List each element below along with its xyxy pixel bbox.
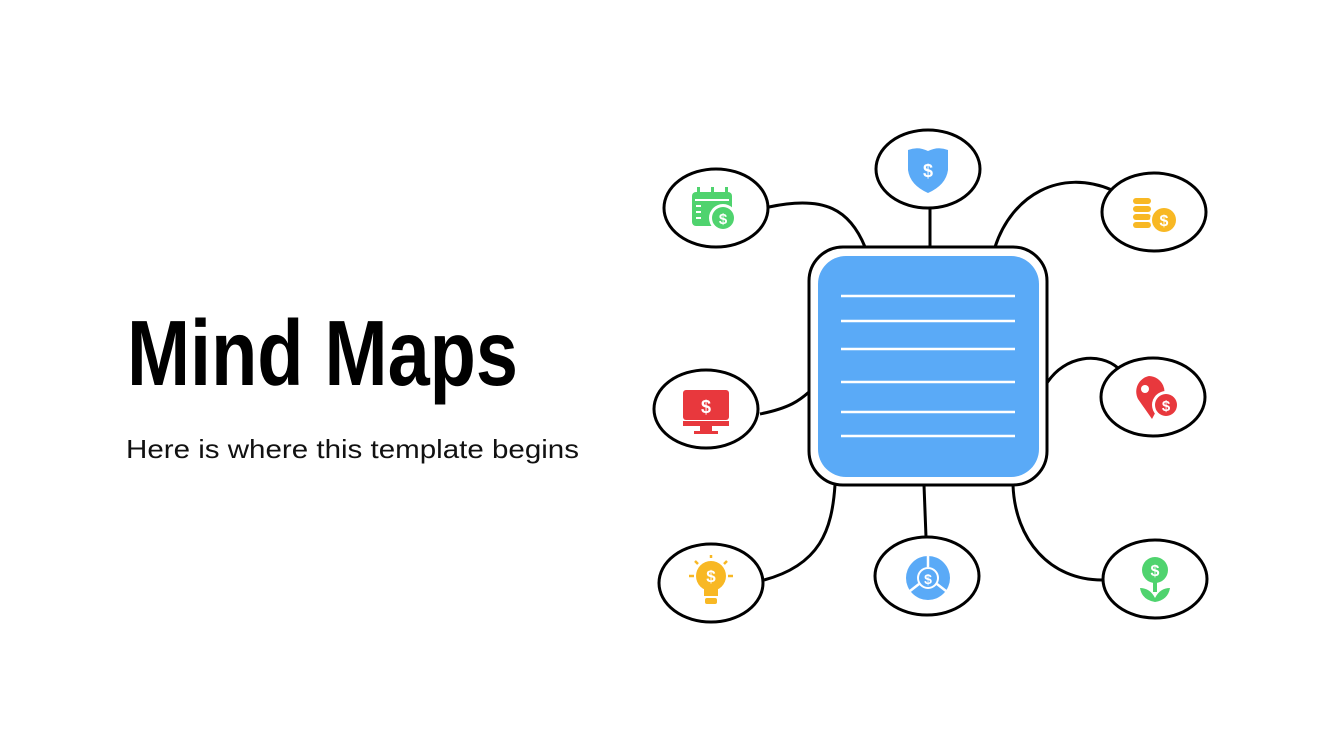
central box	[809, 247, 1047, 485]
node: calendar: $	[719, 211, 728, 228]
node: pie chart	[875, 537, 979, 615]
node: light bulb: $	[706, 567, 716, 586]
node: calendar	[664, 169, 768, 247]
title: Mind Maps	[127, 301, 518, 405]
node: shield: $	[923, 161, 933, 181]
subtitle: Here is where this template begins	[126, 434, 579, 464]
node: pie chart: $	[924, 571, 932, 587]
node: monitor	[654, 370, 758, 448]
node: coins	[1102, 173, 1206, 251]
node: location pin	[1101, 358, 1205, 436]
node: money plant: $	[1151, 563, 1160, 580]
connectors	[760, 182, 1118, 580]
node: monitor: $	[701, 397, 711, 417]
node: light bulb	[659, 544, 763, 622]
node: location pin: $	[1162, 398, 1171, 415]
node: money plant	[1103, 540, 1207, 618]
node: shield	[876, 130, 980, 208]
node: coins: $	[1160, 213, 1169, 230]
